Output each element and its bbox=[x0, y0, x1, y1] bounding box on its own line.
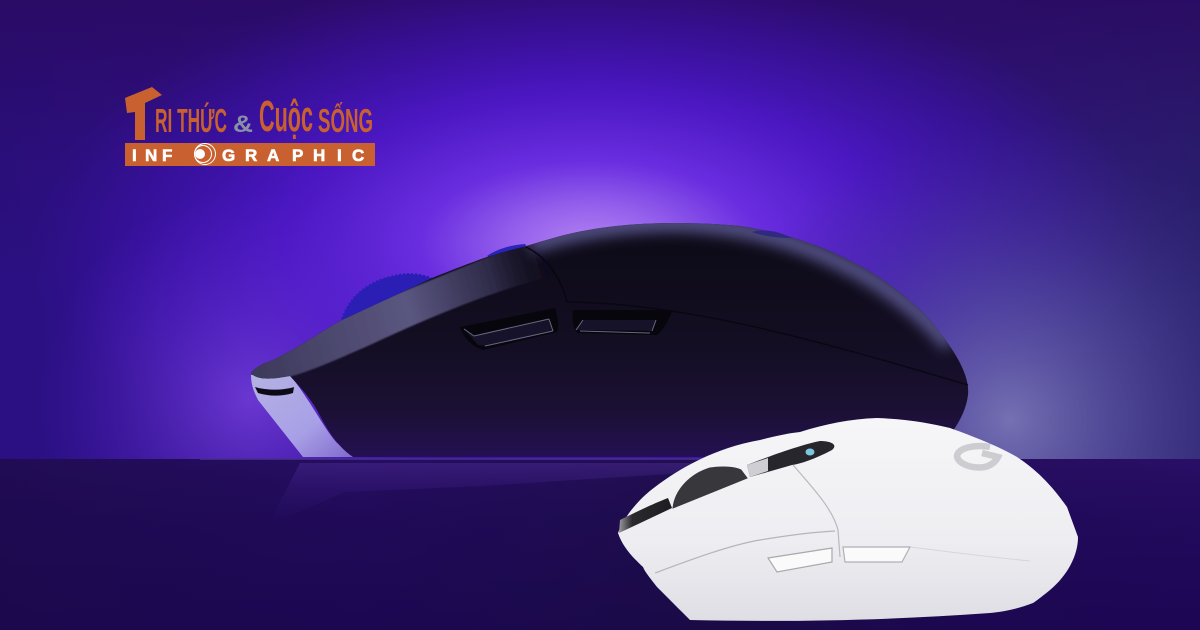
side button front bbox=[768, 548, 832, 572]
shell seam left bbox=[655, 531, 835, 573]
mouse scroll wheel bbox=[342, 274, 435, 328]
logo: Tri Thức & Cuộc Sống Infographic: INF bbox=[132, 146, 172, 165]
logo banner bbox=[125, 143, 375, 166]
logo: Tri Thức & Cuộc Sống Infographic: SỐNG bbox=[318, 101, 373, 139]
black stripe on back bbox=[255, 387, 294, 396]
mouse body bbox=[251, 223, 968, 457]
white gaming mouse bbox=[618, 418, 1078, 621]
side button front bbox=[460, 308, 558, 350]
logo: Tri Thức & Cuộc Sống Infographic: GRAPHIC bbox=[222, 146, 364, 165]
logo wordmark: RI THỨC bbox=[155, 102, 227, 139]
DPI light bbox=[806, 448, 814, 456]
dark slot front bbox=[619, 498, 672, 533]
center seam bbox=[793, 465, 840, 557]
logo: Tri Thức & Cuộc Sống Infographic bbox=[125, 87, 375, 166]
logo O target icon bbox=[194, 144, 216, 164]
shell seam bbox=[567, 302, 968, 385]
side button rear bbox=[573, 310, 673, 335]
body bbox=[618, 418, 1078, 621]
dark slot rear bbox=[747, 441, 834, 477]
back panel bbox=[251, 375, 355, 457]
reflective floor bbox=[0, 458, 1200, 630]
logo mark on top bbox=[752, 230, 792, 238]
scroll wheel bbox=[673, 467, 747, 508]
button seam bbox=[526, 247, 567, 302]
side button rear bbox=[843, 547, 910, 562]
shell seam right bbox=[910, 547, 1030, 561]
dark gaming mouse bbox=[240, 223, 968, 457]
logo letter T bbox=[125, 87, 162, 140]
mouse side button (blue) bbox=[487, 244, 528, 260]
G logo bbox=[957, 446, 998, 467]
logo: Tri Thức & Cuộc Sống Infographic: Cuộc bbox=[259, 92, 313, 141]
mouse upper shell highlights bbox=[240, 223, 950, 385]
logo: Tri Thức & Cuộc Sống Infographic: & bbox=[233, 111, 253, 138]
